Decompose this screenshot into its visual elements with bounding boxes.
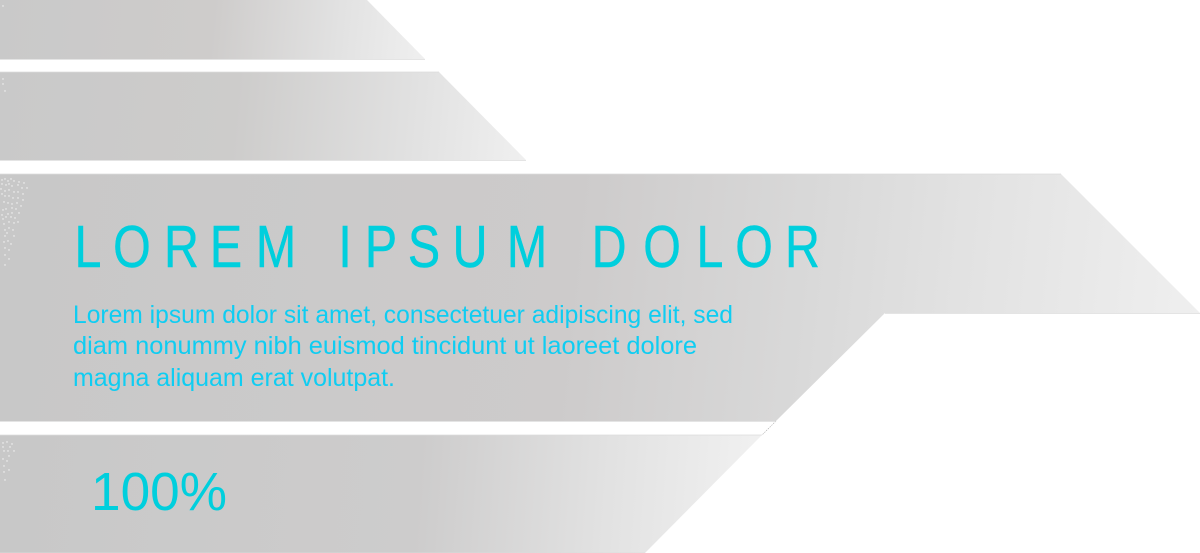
body text: diam nonummy nibh euismod tincidunt ut laoreet dolore	[73, 332, 697, 360]
body text: magna aliquam erat volutpat.	[73, 364, 395, 392]
heading: LOREM IPSUM DOLOR	[75, 215, 820, 280]
band 4	[0, 435, 762, 553]
percentage value: 100%	[91, 462, 227, 522]
body text	[73, 301, 733, 392]
band 2	[0, 72, 526, 160]
band 1	[0, 0, 425, 59]
body text: Lorem ipsum dolor sit amet, consectetuer adipiscing elit, sed	[73, 301, 733, 329]
band 3: main panel	[0, 174, 1200, 421]
